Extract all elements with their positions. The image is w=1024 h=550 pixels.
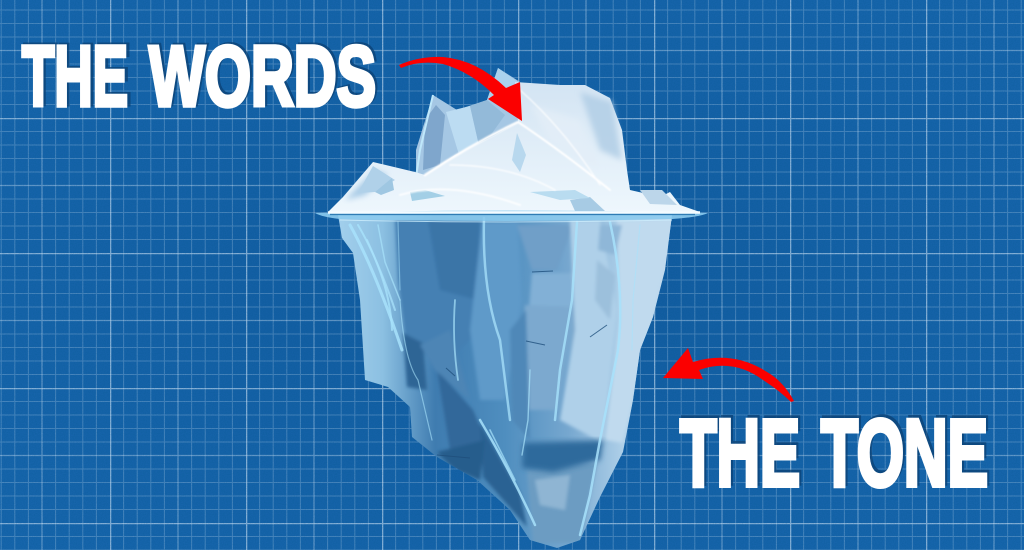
iceberg: main snow peak <box>328 82 700 212</box>
heading: the tone: THE <box>680 400 800 506</box>
arrow: pointing to the tone <box>663 348 794 402</box>
heading: the words: WORDS <box>151 28 378 123</box>
iceberg: submerged mass <box>330 210 680 550</box>
heading: the tone: THE <box>682 398 802 504</box>
heading: the words <box>22 28 378 124</box>
iceberg: back peak <box>416 68 540 190</box>
heading: the words: THE <box>24 28 131 123</box>
iceberg: water surface disc <box>315 210 708 222</box>
heading: the tone <box>680 398 990 506</box>
heading: the words: THE <box>22 30 128 124</box>
arrow: pointing to the words <box>399 57 522 121</box>
iceberg <box>315 68 708 550</box>
heading: the words: WORDS <box>149 30 376 124</box>
